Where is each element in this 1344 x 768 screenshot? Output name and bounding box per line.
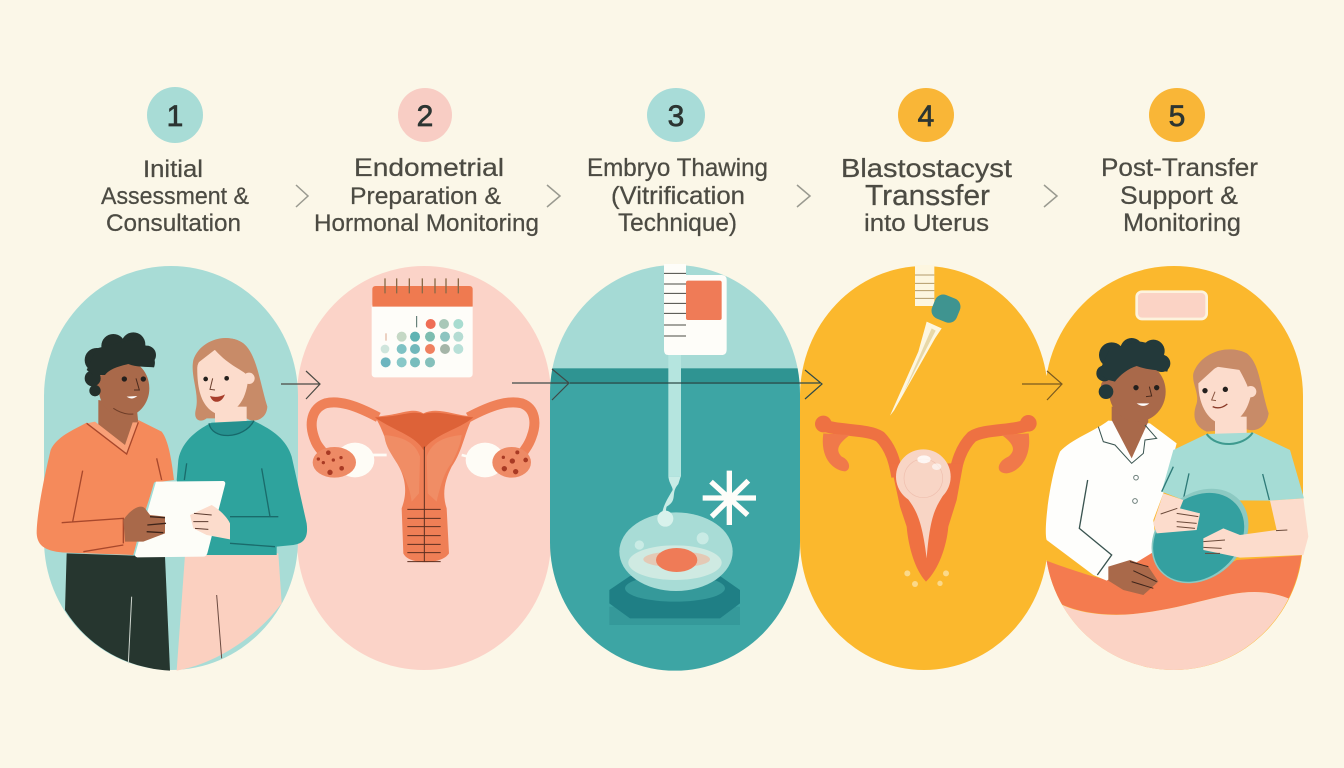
- icon: two people consulting over a tablet: [37, 332, 307, 671]
- text: step 2 heading: Preparation &: [350, 183, 501, 210]
- text: step 1 heading: [101, 156, 249, 237]
- text: step 5 heading: Support &: [1120, 182, 1238, 210]
- text: step 3 heading: (Vitrification: [611, 182, 745, 210]
- step marker 5: [1149, 88, 1205, 142]
- text: step 4 heading: Blastostacyst: [841, 153, 1013, 183]
- icon: vitrification straw with gauge: [662, 264, 727, 518]
- icon: nurse and patient holding belly: [1046, 338, 1308, 603]
- panel: step 3 embryo thawing illustration: [550, 260, 800, 677]
- text: step 1 heading: Consultation: [106, 210, 241, 237]
- text: step 4 heading: Transsfer: [865, 180, 990, 212]
- text: step 1 heading: Initial: [143, 156, 203, 183]
- text: step 2 heading: [314, 154, 539, 237]
- text: step 1 heading: Assessment &: [101, 183, 249, 210]
- step marker 3: 3: [668, 100, 684, 133]
- icon: calendar with cycle days: [372, 278, 473, 377]
- step marker 3: [647, 88, 705, 142]
- icon: embryo dish on base: [609, 511, 740, 625]
- step marker 4: [898, 88, 954, 142]
- text: step 5 heading: [1101, 154, 1258, 237]
- icon: monitor label: [1137, 292, 1207, 319]
- icon: uterus with ovaries: [312, 402, 534, 562]
- step marker 4: 4: [918, 100, 934, 133]
- text: step 5 heading: Monitoring: [1123, 209, 1241, 237]
- arrow: chevron between step 2 and 3: [547, 185, 560, 207]
- arrow: panel 2 to panel 3: [512, 369, 569, 400]
- arrow: chevron between step 4 and 5: [1044, 185, 1057, 207]
- step marker 2: [398, 88, 452, 142]
- icon: transfer catheter pipette: [890, 265, 963, 416]
- text: step 2 heading: Hormonal Monitoring: [314, 210, 539, 237]
- step marker 2: 2: [417, 100, 433, 133]
- text: step 4 heading: into Uterus: [864, 210, 989, 237]
- panel: step 1 assessment illustration: [37, 266, 307, 671]
- panel: step 4 blastocyst transfer illustration: [800, 265, 1048, 670]
- text: step 3 heading: Technique): [618, 209, 737, 237]
- arrow: panel 3 to panel 4: [570, 370, 822, 399]
- step marker 1: [147, 87, 203, 143]
- text: step 2 heading: Endometrial: [354, 154, 504, 182]
- icon: bed blanket waves: [1046, 553, 1302, 670]
- text: step 4 heading: [841, 153, 1013, 237]
- icon: snowflake freeze symbol: [703, 471, 756, 525]
- text: step 3 heading: [587, 154, 768, 237]
- step marker 1: 1: [167, 100, 183, 133]
- arrow: chevron between step 3 and 4: [797, 185, 810, 207]
- arrow: chevron between step 1 and 2: [296, 185, 308, 207]
- step marker 5: 5: [1169, 100, 1185, 133]
- panel: step 2 endometrial preparation illustration: [297, 266, 551, 670]
- panel: step 5 post-transfer support illustration: [1040, 266, 1308, 677]
- icon: uterus with blastocyst: [815, 415, 1037, 587]
- text: step 3 heading: Embryo Thawing: [587, 154, 768, 182]
- arrow: panel 1 to panel 2: [281, 371, 320, 399]
- arrow: panel 4 to panel 5: [1022, 371, 1062, 400]
- text: step 5 heading: Post-Transfer: [1101, 154, 1258, 182]
